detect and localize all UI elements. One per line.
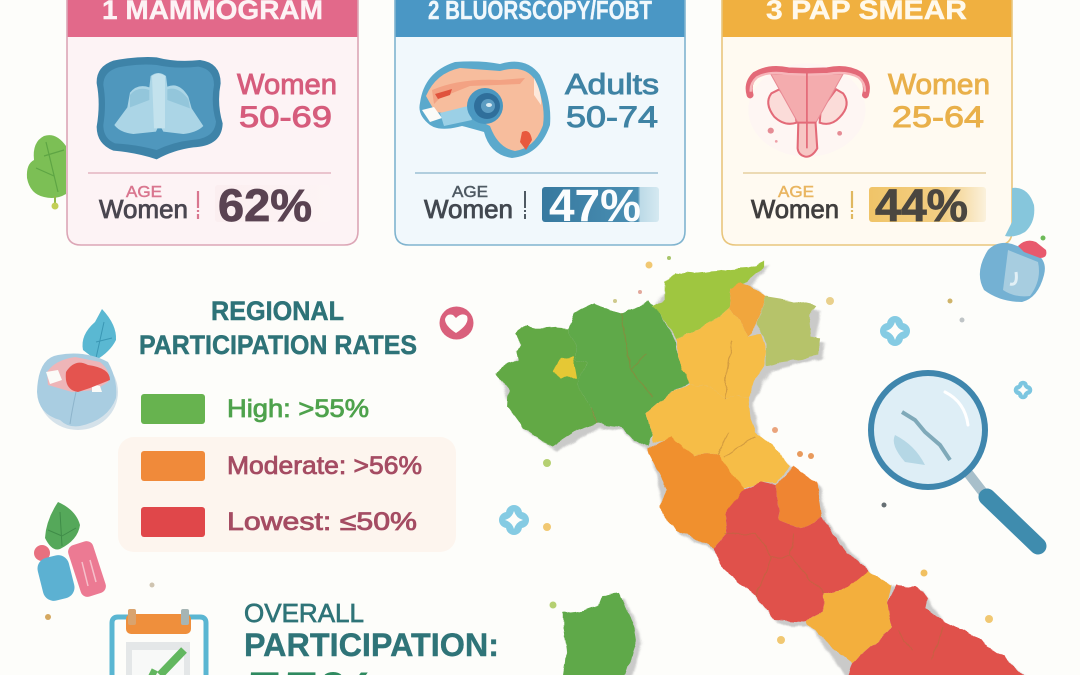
heading: regional participation rates: REGIONAL: [211, 296, 344, 326]
map shadow: [500, 265, 1032, 675]
icon: uterus: [748, 63, 866, 157]
panel: screening card 2: [395, 0, 685, 245]
label: target group: [237, 69, 337, 134]
label: target group: Adults: [565, 69, 659, 101]
panel: pap smear card: [722, 0, 1012, 245]
callout: overall participation: [244, 598, 499, 675]
label: target group: Women: [237, 69, 337, 101]
region: Aosta spot: [553, 357, 578, 378]
stat: age label: Women: [424, 194, 513, 224]
region: Marche: [777, 467, 823, 528]
decorative dots: [45, 256, 993, 644]
region: Emilia: [646, 385, 790, 488]
callout: overall participation: PARTICIPATION:: [244, 627, 499, 663]
card header: [67, 0, 358, 37]
label: target group: 50-74: [566, 101, 658, 134]
icons: blue flower rings: [499, 316, 1032, 535]
icon: apple with leaf: [37, 309, 118, 430]
stat: 44 percent: 44%: [875, 180, 968, 231]
icon: green leaf left: [27, 135, 66, 210]
icon: magnifying glass: [871, 373, 1038, 546]
heading: regional participation rates: PARTICIPATION RATES: [139, 330, 417, 360]
map: Italy regional participation: [495, 260, 1032, 675]
legend: lowest: [141, 507, 417, 537]
stat: age label: Women: [99, 194, 188, 224]
panel: mammogram card: [67, 0, 358, 245]
region: central red: [713, 482, 868, 622]
label: target group: [888, 69, 990, 134]
label: target group: Women: [888, 69, 990, 101]
legend: high: High: >55%: [227, 395, 369, 423]
icon: clipboard with check: [112, 609, 206, 675]
region: south red: [847, 585, 1027, 675]
icon: heart ring: [440, 306, 474, 340]
stat: age label: AGE: [778, 184, 814, 201]
region: Friuli: [757, 297, 821, 367]
region: Sardinia: [562, 593, 637, 675]
legend: moderate: [141, 451, 422, 481]
label: target group: 50-69: [239, 101, 332, 134]
stat: 47 percent: 47%: [549, 180, 641, 231]
region: Lombardy: [568, 302, 690, 447]
legend row backgrounds: [118, 437, 456, 552]
region: Trentino: [650, 260, 765, 338]
region: Tuscany: [646, 437, 746, 548]
card header: [395, 0, 685, 37]
icon: bottles and leaf: [34, 502, 108, 603]
region: Molise: [805, 572, 891, 663]
legend: [118, 394, 456, 552]
stat: age label: Women: [751, 194, 839, 224]
icon: mammogram scan: [97, 57, 223, 159]
stat: age label: AGE: [126, 184, 162, 201]
region: Alto orange: [729, 282, 765, 337]
region: Veneto: [677, 308, 767, 398]
legend: lowest: Lowest: ≤50%: [227, 508, 417, 536]
heading: regional participation rates: [139, 296, 417, 360]
label: target group: [565, 69, 659, 134]
legend: high: [141, 394, 369, 424]
callout: overall participation: OVERALL: [244, 598, 364, 628]
label: target group: 25-64: [892, 101, 984, 134]
card header: [722, 0, 1012, 37]
icon: jar with leaf right: [980, 188, 1046, 302]
stat: 62 percent: 62%: [218, 180, 312, 231]
icon: colon cross-section: [419, 61, 550, 158]
legend: moderate: Moderate: >56%: [227, 452, 422, 480]
region: Piedmont: [495, 325, 595, 447]
stat: age label: AGE: [452, 184, 488, 201]
